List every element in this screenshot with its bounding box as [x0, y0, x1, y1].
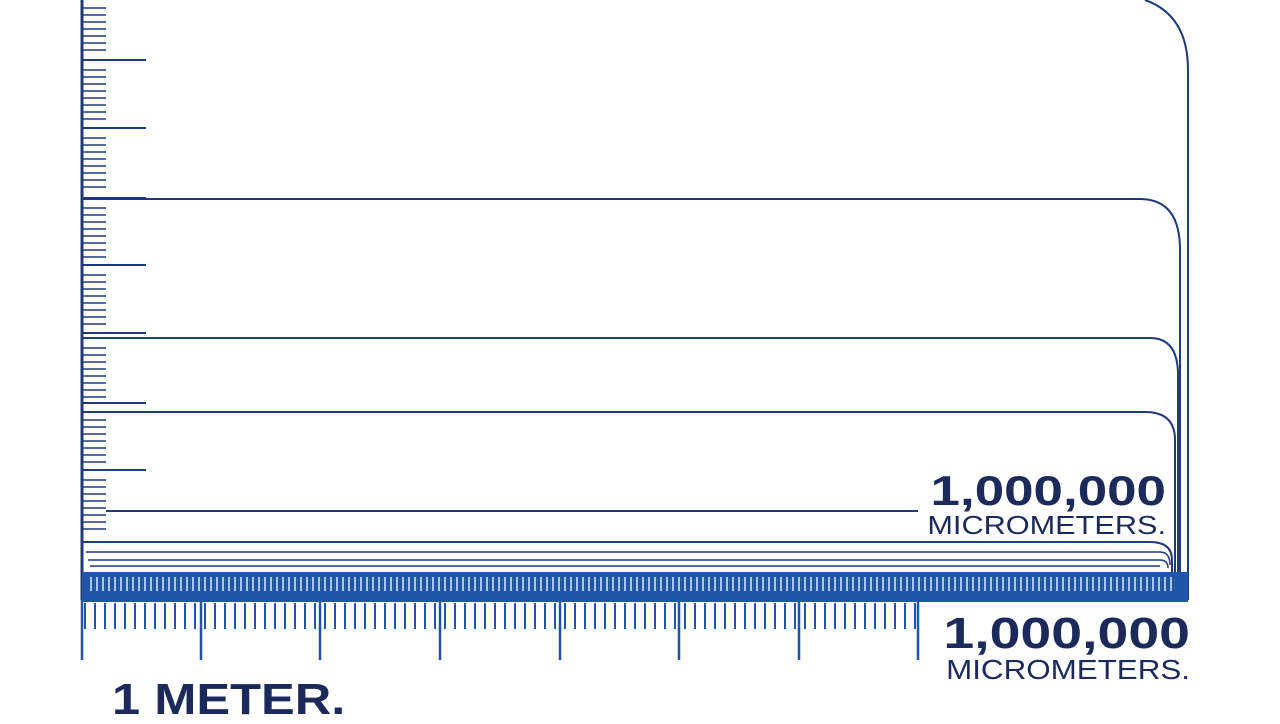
label: lower micrometers: 1,000,000	[943, 609, 1190, 658]
label: 1 meter: 1 METER.	[112, 675, 345, 724]
label: lower micrometers: MICROMETERS.	[946, 654, 1190, 685]
label: upper micrometers: MICROMETERS.	[927, 510, 1166, 540]
label: upper micrometers: 1,000,000	[931, 467, 1166, 514]
blue ruler bar	[82, 572, 1188, 602]
label: lower micrometers	[943, 609, 1190, 685]
left vertical axis	[82, 0, 146, 600]
label: upper micrometers	[927, 467, 1166, 540]
nested rounded lines	[82, 0, 1188, 600]
bottom ruler ticks	[82, 600, 920, 660]
